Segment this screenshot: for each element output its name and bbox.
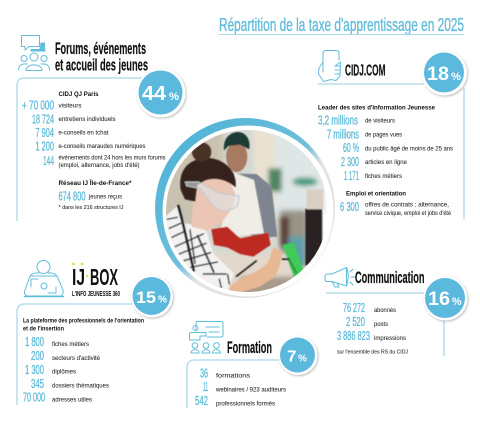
heading: communication: Communication	[355, 268, 424, 287]
logo: IJ BOX: BOX	[90, 264, 118, 290]
text block: leader: 1 171	[344, 169, 359, 183]
text block: plateforme: dossiers thématiques	[52, 382, 109, 390]
text block: emploi et orientation	[340, 190, 451, 217]
text block: plateforme: 345	[31, 377, 44, 391]
icon: person at laptop	[24, 260, 63, 296]
text block: leader: 3,2 millions	[318, 114, 358, 128]
text block: leader: 7 millions	[327, 128, 359, 142]
panel border	[318, 84, 464, 219]
text block: plateforme: 1 300	[25, 363, 44, 377]
text block: formation figures: professionnels formés	[216, 400, 275, 408]
text block: plateforme	[23, 318, 144, 404]
text block: plateforme: 1 800	[25, 335, 44, 349]
text block: communication figures: 3 886 823	[337, 329, 370, 343]
text block: plateforme: secteurs d'activité	[52, 355, 100, 362]
text block: plateforme: 200	[31, 349, 44, 363]
badge: 7%	[278, 336, 318, 375]
panel: communication	[325, 268, 468, 356]
badge: 15%: 15	[136, 288, 156, 307]
text block: emploi et orientation: offres de contrats : alternance,	[365, 202, 449, 208]
text block: CIDJ QJ Paris: visiteurs	[58, 102, 82, 110]
logo: IJ BOX: IJ	[72, 264, 85, 290]
panel border	[326, 293, 444, 356]
panel: forums	[17, 36, 186, 221]
text block: communication figures: posts	[374, 321, 388, 328]
text block: communication figures: abonnés	[374, 307, 396, 314]
text block: CIDJ QJ Paris: 144	[43, 154, 54, 168]
panel: IJ BOX	[17, 260, 173, 405]
badge: 44%: %	[169, 91, 179, 103]
text block: communication figures: 2 520	[346, 315, 365, 329]
text block: communication figures	[337, 301, 408, 356]
logo: IJ BOX	[72, 263, 120, 298]
badge: 16%: %	[452, 296, 462, 308]
text block: emploi et orientation: Emploi et orientation	[346, 190, 406, 198]
text block: plateforme: adresses utiles	[52, 396, 92, 404]
text block: Réseau IJ: * dans les 216 structures IJ	[58, 205, 124, 211]
text block: CIDJ QJ Paris: e-conseils maraudes numériques	[58, 143, 146, 150]
icon: presenter and audience	[190, 322, 223, 353]
panel border	[187, 360, 279, 408]
text block: Réseau IJ: jeunes reçus	[88, 194, 122, 200]
icon: forum discussion and people	[18, 36, 50, 70]
text block: Réseau IJ	[58, 178, 132, 211]
panel border	[17, 78, 142, 221]
text block: leader	[318, 104, 453, 183]
text block: CIDJ QJ Paris: e-conseils en tchat	[58, 130, 109, 136]
text block: formation figures: formations	[216, 372, 250, 380]
text block: CIDJ QJ Paris	[22, 91, 166, 169]
text block: formation figures: 542	[195, 394, 208, 408]
badge: 16%: 16	[428, 289, 450, 310]
text block: leader: du public âgé de moins de 25 ans	[365, 146, 453, 152]
panel: CIDJ.COM	[318, 50, 467, 219]
text block: leader: 2 300	[341, 155, 359, 169]
text block: leader: fiches métiers	[365, 173, 402, 180]
badge: 15%: %	[158, 294, 167, 306]
text block: leader: 60 %	[343, 141, 359, 155]
text block: CIDJ QJ Paris: CIDJ QJ Paris	[58, 91, 99, 98]
badge: 7%: 7	[287, 348, 297, 366]
text block: communication figures: 76 272	[343, 301, 365, 315]
text block: CIDJ QJ Paris: 1 200	[36, 140, 54, 154]
badge: 44%: 44	[142, 83, 167, 105]
text block: CIDJ QJ Paris: 18 724	[32, 112, 54, 126]
text block: communication figures: sur l'ensemble des RS du CIDJ	[337, 350, 408, 356]
heading: forums: Forums, événements	[55, 39, 146, 58]
text block: leader: de visiteurs	[365, 118, 395, 124]
text block: formation figures: 36	[200, 366, 208, 380]
text block: formation figures: webinaires / 923 auditeurs	[215, 386, 286, 394]
text block: emploi et orientation: 6 300	[340, 200, 359, 214]
icon: megaphone	[325, 268, 355, 287]
heading: forums: et accueil des jeunes	[55, 56, 148, 74]
text block: plateforme: diplômes	[52, 368, 76, 376]
text block: CIDJ QJ Paris: événements dont 24 hors les murs forums	[58, 154, 166, 162]
text block: formation figures: 11	[203, 380, 208, 394]
text block: plateforme: et de l'insertion	[23, 326, 64, 332]
badge: 7%: %	[298, 354, 307, 364]
badge: 44%	[136, 68, 186, 118]
badge: 18%	[422, 50, 467, 96]
badge: 18%: %	[451, 71, 461, 83]
heading: formation: Formation	[227, 338, 272, 357]
text block: CIDJ QJ Paris: (emploi, alternance, jobs d'été)	[58, 162, 140, 169]
badge: 18%: 18	[427, 64, 449, 85]
text block: formation figures	[195, 366, 286, 408]
text block: CIDJ QJ Paris: 7 904	[36, 126, 54, 140]
text block: communication figures: impressions	[374, 335, 406, 342]
text block: CIDJ QJ Paris: + 70 000	[22, 98, 54, 112]
central photo	[155, 118, 335, 300]
text block: leader: articles en ligne	[365, 159, 407, 166]
text block: emploi et orientation: service civique, emploi et jobs d'été	[365, 210, 451, 217]
panel: formation	[187, 322, 318, 408]
panel border	[17, 304, 134, 405]
badge: 16%	[424, 276, 468, 320]
badge: 15%	[131, 276, 173, 318]
text block: plateforme: La plateforme des professionnels de l'orientation	[23, 318, 144, 324]
text block: plateforme: fiches métiers	[52, 341, 89, 348]
heading: forums	[55, 39, 148, 74]
text block: leader: Leader des sites d'Information Jeunesse	[318, 104, 435, 112]
text block: Réseau IJ: Réseau IJ Île-de-France*	[58, 178, 132, 187]
text block: Réseau IJ: 674 800	[58, 190, 86, 204]
heading: CIDJ.COM: CIDJ.COM	[345, 62, 386, 80]
text block: leader: de pages vues	[365, 132, 402, 138]
text block: CIDJ QJ Paris: entretiens individuels	[58, 116, 116, 123]
icon: hand holding phone	[318, 50, 340, 82]
text block: plateforme: 70 000	[23, 390, 45, 404]
logo: IJ BOX: L'INFO JEUNESSE 360	[72, 289, 120, 298]
